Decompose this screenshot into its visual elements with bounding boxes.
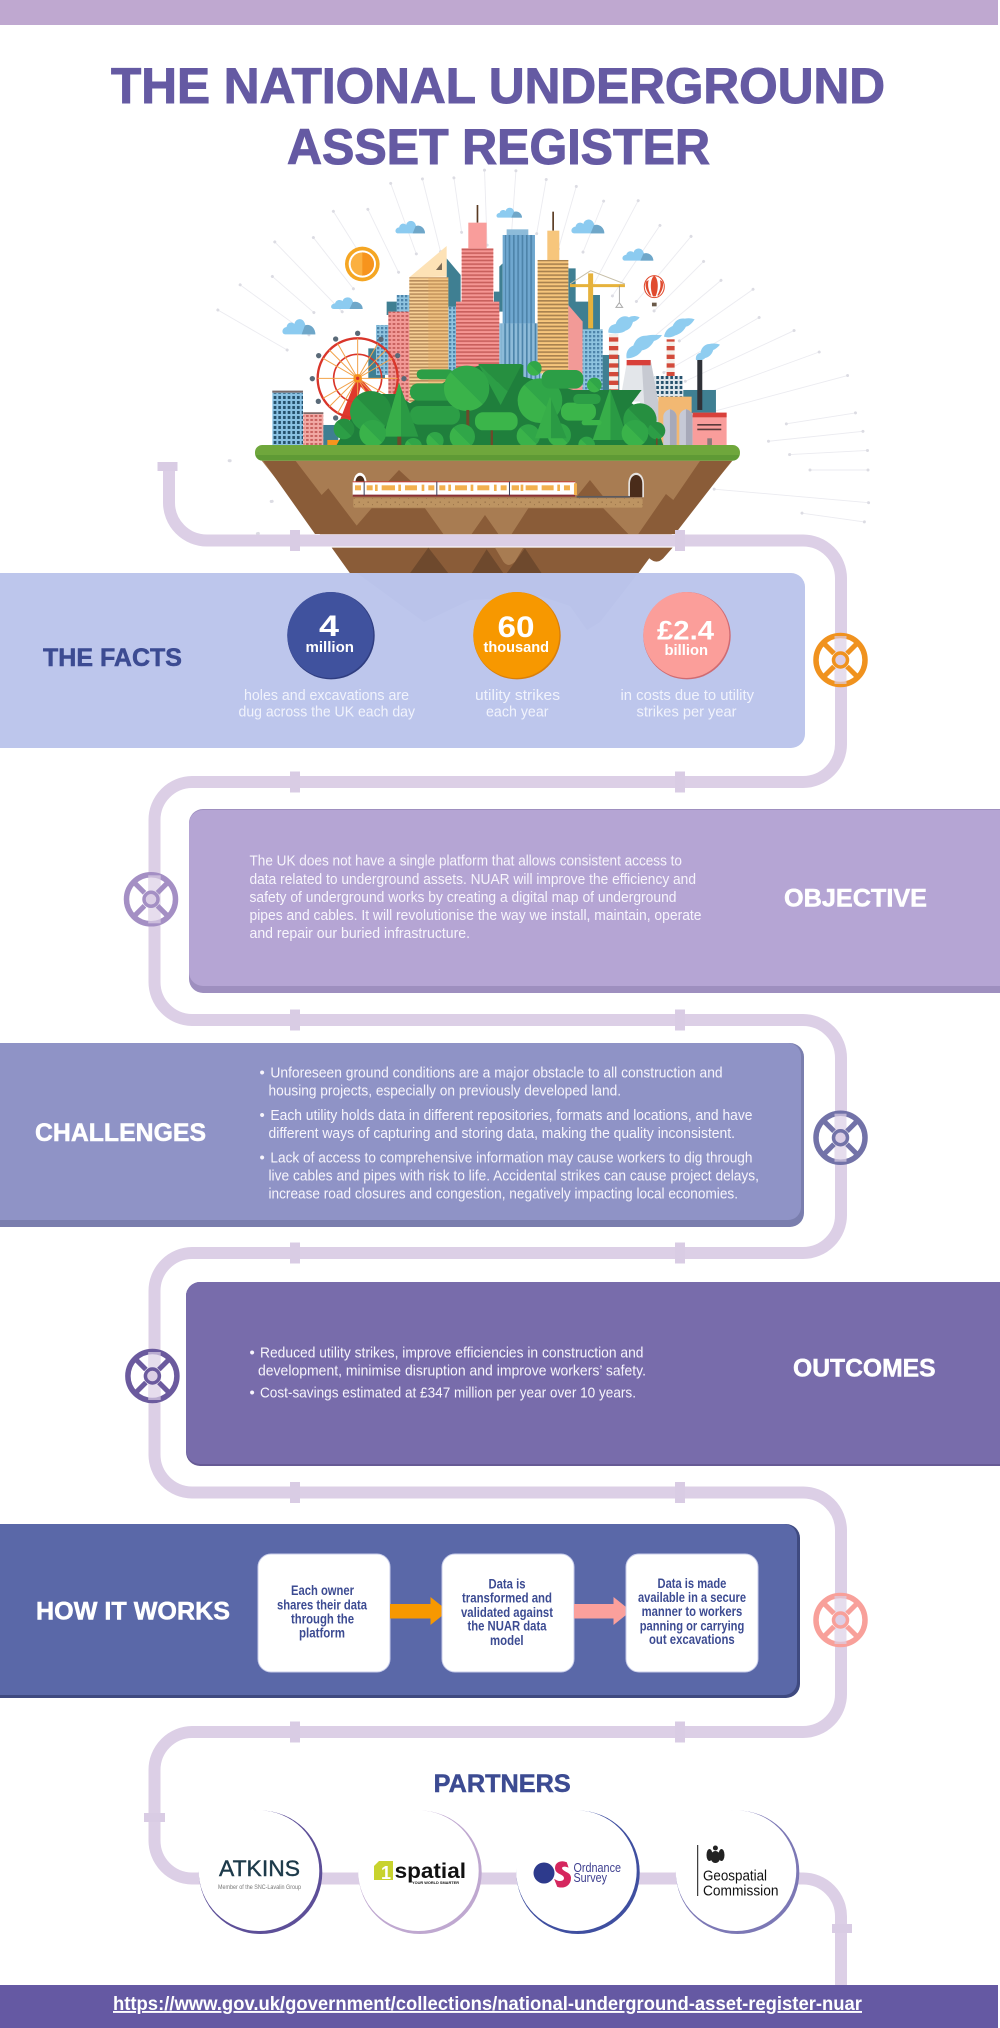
step 3 box: out excavations	[649, 1632, 735, 1647]
heading: CHALLENGES	[35, 1119, 206, 1147]
bullet list: Lack of access to comprehensive information may cause workers to dig through	[270, 1149, 752, 1166]
soil layers	[262, 461, 733, 573]
partner: 1spatial: spatial	[395, 1860, 466, 1883]
partner: Geospatial Commission	[676, 1810, 799, 1934]
partner: Atkins	[199, 1810, 322, 1934]
body text	[250, 853, 702, 942]
bullet list: Reduced utility strikes, improve efficiencies in construction and	[260, 1345, 644, 1362]
body text: data related to underground assets. NUAR will improve the efficiency and	[250, 871, 696, 888]
valve: periwinkle	[816, 1113, 865, 1162]
left foreground buildings	[272, 391, 346, 445]
body text: safety of underground works by creating a digital map of underground	[250, 889, 676, 906]
stat: £2.4 billion: billion	[664, 642, 708, 659]
factories with smoke	[608, 316, 727, 445]
panel: objective	[189, 809, 1000, 993]
step 3 box: panning or carrying	[640, 1618, 744, 1633]
hot-air balloon	[644, 276, 664, 306]
bullet list: Each utility holds data in different repositories, formats and locations, and have	[270, 1107, 752, 1124]
partner: Geospatial Commission: Geospatial	[703, 1868, 767, 1885]
partner: Ordnance Survey	[516, 1810, 640, 1934]
stat: 60 thousand: 60	[498, 611, 534, 644]
stat: 4 million: million	[306, 639, 354, 656]
stat: 60 thousand	[473, 592, 561, 721]
stat: 4 million: 4	[319, 610, 339, 643]
partner: 1spatial	[358, 1810, 482, 1934]
trees and park	[334, 361, 665, 455]
body text: and repair our buried infrastructure.	[250, 925, 470, 942]
arrow: step 1 to 2	[390, 1597, 448, 1625]
stat: 60 thousand: thousand	[484, 639, 549, 656]
bullet list: •	[260, 1149, 265, 1166]
stat: 4 million	[238, 592, 415, 721]
sun	[345, 247, 380, 281]
body text: pipes and cables. It will revolutionise the way we install, maintain, operate	[250, 907, 702, 924]
panel: how it works	[0, 1524, 800, 1698]
bullet list: live cables and pipes with risk to life. Accidental strikes can cause project delays,	[268, 1167, 759, 1184]
step 3 box	[626, 1554, 758, 1672]
partners heading: PARTNERS	[434, 1770, 571, 1798]
bottom band with source link: https://www.gov.uk/government/collections/national-underground-asset-register-nuar	[113, 1994, 863, 2015]
step 3 box: Data is made	[658, 1576, 727, 1591]
body text: The UK does not have a single platform that allows consistent access to	[250, 853, 682, 870]
partner: Ordnance Survey: Survey	[574, 1871, 608, 1885]
step 1 box: through the	[291, 1612, 354, 1626]
grass top	[255, 445, 740, 461]
partner: Ordnance Survey: Ordnance	[574, 1861, 621, 1875]
ferris wheel	[310, 331, 407, 421]
step 1 box: shares their data	[277, 1597, 367, 1612]
step 3 box: available in a secure	[638, 1590, 746, 1605]
valve: pink	[816, 1596, 865, 1644]
partner: 1spatial: 1	[381, 1863, 391, 1883]
construction crane	[570, 271, 625, 328]
step 1 box	[258, 1554, 390, 1672]
subway train in tunnel	[353, 473, 644, 508]
partner: Atkins: Member of the SNC-Lavalin Group	[218, 1884, 301, 1891]
valve: orange	[816, 636, 865, 684]
skyscrapers	[368, 205, 619, 407]
step 2 box	[442, 1554, 574, 1672]
bullet list: •	[250, 1384, 255, 1401]
top band	[0, 0, 998, 25]
valve: purple	[128, 1352, 177, 1400]
stat: 60 thousand: each year	[486, 704, 549, 721]
heading: OBJECTIVE	[784, 885, 927, 913]
bullet list	[260, 1065, 759, 1202]
stat: 60 thousand: utility strikes	[475, 687, 560, 704]
bullet list: increase road closures and congestion, negatively impacting local economies.	[268, 1185, 738, 1202]
heading: THE FACTS	[43, 644, 182, 672]
bullet list: housing projects, especially on previously developed land.	[268, 1083, 621, 1100]
title: ASSET REGISTER	[287, 119, 710, 175]
stat: £2.4 billion: strikes per year	[636, 704, 736, 721]
underground pipe	[154, 465, 841, 1990]
step 2 box: model	[490, 1633, 524, 1648]
bullet list: •	[250, 1345, 255, 1362]
bullet list: •	[260, 1065, 265, 1082]
sunburst rays behind the city	[218, 170, 869, 534]
partner: 1spatial: YOUR WORLD SMARTER	[412, 1881, 460, 1885]
stat: 4 million: dug across the UK each day	[238, 704, 415, 721]
step 2 box: validated against	[461, 1605, 553, 1620]
arrow: step 2 to 3	[574, 1597, 631, 1625]
panel: challenges	[0, 1043, 804, 1227]
step 1 box: platform	[299, 1626, 345, 1641]
bullet list: Unforeseen ground conditions are a major obstacle to all construction and	[270, 1065, 723, 1082]
step 2 box: transformed and	[462, 1591, 552, 1606]
pipe flanges	[144, 462, 852, 1933]
partner: Geospatial Commission: Commission	[703, 1882, 778, 1899]
heading: OUTCOMES	[793, 1355, 936, 1383]
bullet list	[250, 1345, 646, 1401]
illustration: city on a floating island	[255, 205, 740, 573]
icon: royal crest	[706, 1846, 724, 1863]
stat: £2.4 billion	[620, 592, 754, 721]
partner: Atkins: ATKINS	[219, 1856, 300, 1881]
stat: 4 million: holes and excavations are	[244, 687, 409, 704]
panel: outcomes	[186, 1282, 1000, 1466]
stat: £2.4 billion: in costs due to utility	[620, 687, 754, 704]
step 1 box: Each owner	[291, 1583, 355, 1598]
title	[111, 58, 885, 175]
step 2 box: the NUAR data	[468, 1619, 547, 1634]
bullet list: •	[260, 1107, 265, 1124]
title: THE NATIONAL UNDERGROUND	[111, 58, 885, 114]
stat: £2.4 billion: £2.4	[657, 616, 714, 646]
bullet list: development, minimise disruption and improve workers’ safety.	[258, 1363, 646, 1380]
bullet list: different ways of capturing and storing data, making the quality inconsistent.	[268, 1125, 735, 1142]
bottom band with source link	[0, 1985, 998, 2028]
step 3 box: manner to workers	[642, 1604, 742, 1619]
valve: lilac	[126, 875, 176, 924]
step 2 box: Data is	[488, 1577, 526, 1592]
panel: the facts	[0, 573, 805, 748]
clouds	[282, 208, 653, 334]
heading: HOW IT WORKS	[36, 1598, 230, 1626]
bullet list: Cost-savings estimated at £347 million per year over 10 years.	[260, 1384, 636, 1401]
